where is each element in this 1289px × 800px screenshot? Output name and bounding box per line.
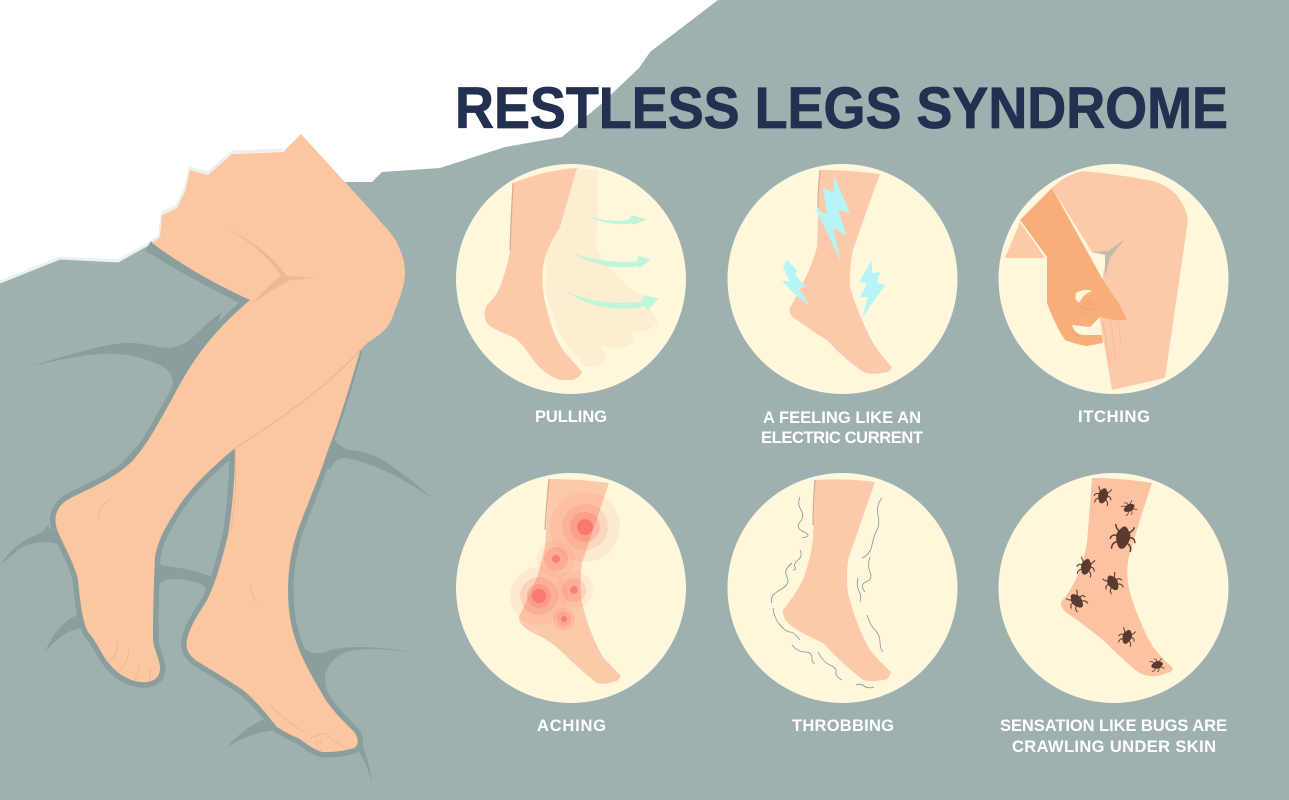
circle	[998, 164, 1228, 394]
panel: itching	[998, 164, 1228, 394]
white bed sheet	[0, 0, 718, 282]
label: pulling: PULLING	[535, 408, 607, 426]
label: crawling bugs	[1000, 717, 1227, 756]
label: itching: ITCHING	[1078, 408, 1150, 426]
title: RESTLESS LEGS SYNDROME	[455, 76, 1228, 141]
circle	[456, 164, 686, 394]
lightning bolts	[782, 176, 885, 318]
mattress creases	[0, 312, 432, 783]
circle	[998, 473, 1228, 703]
foot edge line	[545, 479, 549, 530]
foot	[484, 168, 582, 380]
label: aching: ACHING	[537, 717, 606, 735]
hand	[1020, 188, 1127, 346]
label: throbbing: THROBBING	[792, 717, 894, 735]
finger lines	[1070, 300, 1098, 338]
skin folds	[1103, 322, 1121, 365]
illustration: legs on mattress	[0, 134, 432, 783]
knee crease	[1092, 239, 1125, 277]
foot	[783, 479, 891, 681]
foot edge line	[813, 480, 815, 525]
ghost feet	[540, 168, 658, 367]
panel: throbbing	[728, 473, 958, 703]
gap between fingers	[1076, 290, 1092, 302]
foot edge line	[818, 170, 820, 208]
label: crawling bugs: CRAWLING UNDER SKIN	[1012, 738, 1216, 756]
leg outlines	[55, 246, 360, 752]
pain spots	[510, 492, 620, 630]
thigh	[1005, 171, 1188, 390]
foot	[1061, 478, 1173, 676]
foot	[519, 479, 621, 684]
panel: electric current	[728, 164, 958, 394]
panel: crawling bugs	[998, 473, 1228, 703]
panel: pulling	[456, 164, 686, 394]
circle	[456, 473, 686, 703]
label: electric current: ELECTRIC CURRENT	[761, 429, 923, 447]
throbbing lines	[771, 497, 883, 688]
circle	[728, 473, 958, 703]
knee and foot creases	[98, 227, 363, 748]
bugs	[1064, 485, 1165, 673]
foot	[790, 170, 892, 374]
label: crawling bugs: SENSATION LIKE BUGS ARE	[1000, 717, 1227, 735]
label: electric current	[761, 409, 923, 447]
foot edge line	[510, 183, 513, 250]
sheet edge shading	[0, 150, 283, 282]
back leg	[187, 345, 362, 752]
label: electric current: A FEELING LIKE AN	[763, 409, 921, 427]
circle	[728, 164, 958, 394]
motion arrows	[563, 215, 658, 310]
panel: aching	[456, 473, 686, 703]
front leg	[55, 134, 405, 682]
